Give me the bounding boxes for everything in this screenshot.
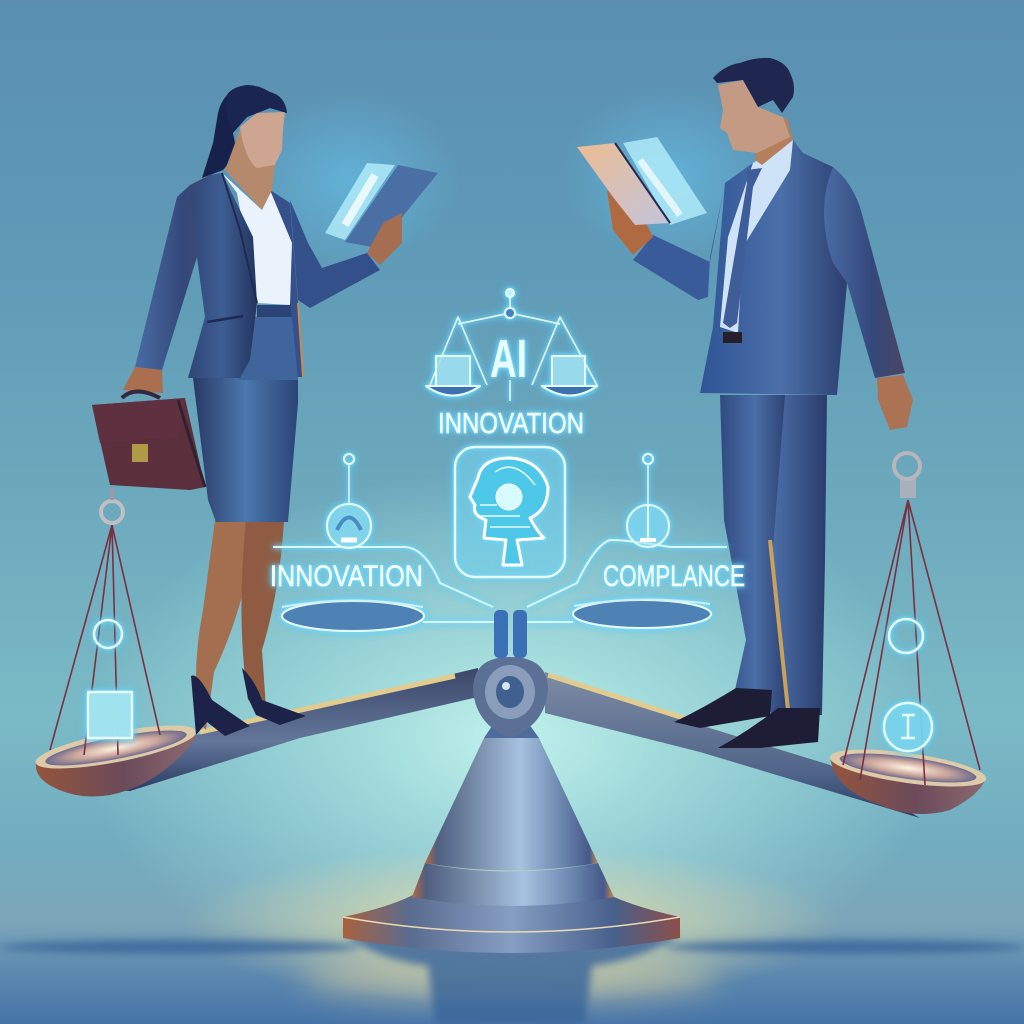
- right disc: [573, 599, 711, 628]
- jacket torso: [188, 173, 257, 378]
- floor shadow: [0, 935, 1024, 1024]
- woman: [123, 85, 380, 736]
- icon: right lollipop node: [627, 454, 669, 547]
- pivot hub: [473, 657, 548, 738]
- right pan holo icons: [884, 619, 932, 751]
- near arm: [633, 183, 725, 300]
- far arm: [824, 167, 905, 378]
- shoes: [191, 668, 306, 736]
- briefcase: [92, 392, 205, 490]
- hologram: AI innovation and compliance diagram: [88, 289, 932, 751]
- legs: [196, 520, 284, 730]
- connector lines: [273, 540, 727, 622]
- stand: [343, 657, 680, 953]
- left disc: [282, 600, 424, 631]
- label: compliance: COMPLANCE: [603, 560, 745, 593]
- icon: small AI scales: [426, 289, 597, 401]
- neck: [755, 118, 793, 165]
- face: [718, 80, 790, 153]
- shoes: [674, 688, 820, 748]
- central pillar on pivot: [494, 610, 527, 658]
- floor glow: [300, 954, 720, 1006]
- tablet body: [577, 143, 670, 225]
- tablet body: [345, 165, 438, 248]
- hand: [367, 213, 402, 265]
- left pan holo icons: [88, 620, 132, 738]
- right pan ropes: [843, 453, 980, 785]
- label: AI: AI: [490, 329, 527, 389]
- jacket: [700, 140, 847, 395]
- icon: left lollipop node: [327, 454, 371, 548]
- hair: [713, 58, 794, 113]
- hand left: [123, 367, 163, 393]
- hair back: [202, 85, 287, 178]
- left pan: [33, 717, 199, 796]
- base plate: [343, 888, 680, 953]
- trousers: [720, 395, 827, 716]
- waistband: [257, 305, 292, 317]
- right pan: [828, 742, 988, 814]
- skirt upper: [238, 317, 298, 380]
- skirt: [193, 378, 298, 522]
- jacket back: [270, 190, 303, 377]
- hand on tablet: [607, 190, 653, 255]
- left pan ropes: [50, 488, 160, 755]
- label: innovation top: INNOVATION: [438, 408, 584, 440]
- hand: [877, 375, 913, 430]
- right beam: [545, 672, 920, 818]
- man's tablet: [577, 137, 707, 225]
- beam scale: [33, 453, 988, 818]
- shirt and tie: [720, 140, 793, 343]
- man: [607, 58, 913, 748]
- ring: [412, 863, 614, 906]
- hair top: [226, 85, 287, 130]
- panel: AI head icon: [455, 447, 565, 577]
- neck: [225, 130, 275, 210]
- woman's tablet: [325, 163, 438, 265]
- blouse: [222, 173, 292, 305]
- left beam: [100, 668, 478, 791]
- labels: [270, 329, 745, 593]
- right arm: [290, 200, 380, 308]
- face: [240, 112, 285, 168]
- label: innovation left: INNOVATION: [270, 560, 423, 593]
- left arm: [135, 175, 215, 370]
- cone: [425, 738, 598, 870]
